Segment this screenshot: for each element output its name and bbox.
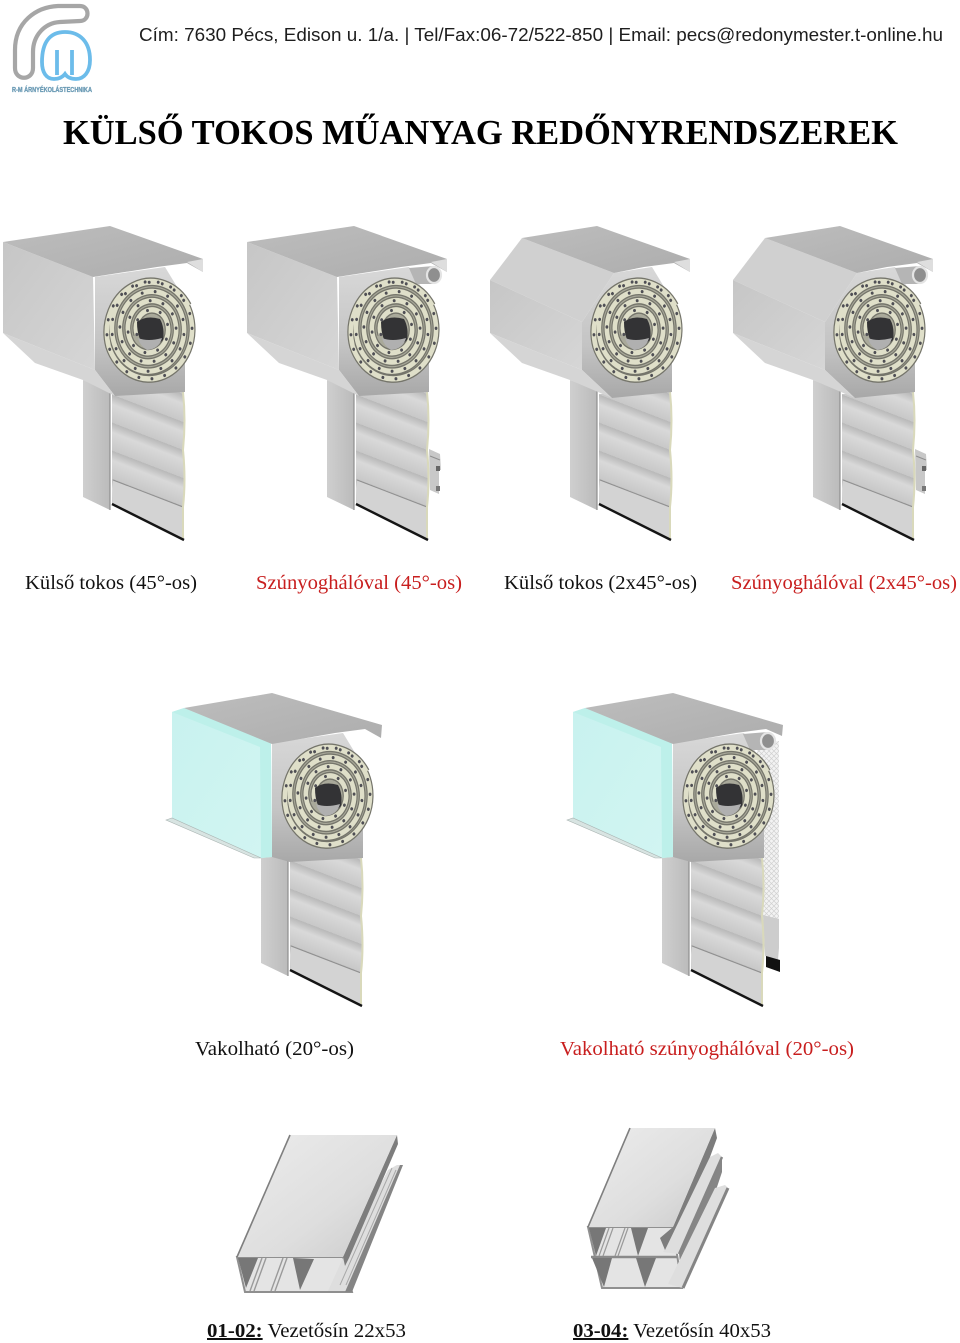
dark band between rails xyxy=(679,1157,722,1264)
left edge xyxy=(588,1128,630,1227)
top face xyxy=(588,1128,715,1227)
top face xyxy=(237,1135,397,1257)
cyan insulated front xyxy=(172,708,272,858)
caption 03-04: 03-04: Vezetősín 40x53 xyxy=(573,1320,771,1342)
caption 01-02: 01-02: Vezetősín 22x53 xyxy=(207,1320,406,1342)
caption row 2 xyxy=(195,1038,854,1060)
shutter 2: with insect net 45 xyxy=(247,226,449,540)
logo: grey arch xyxy=(15,6,88,78)
left edge xyxy=(237,1135,290,1257)
caption 2: Szúnyoghálóval (45°-os) xyxy=(256,572,462,594)
contact line: Cím: 7630 Pécs, Edison u. 1/a. | Tel/Fax:06-72/522-850 | Email: pecs@redonymester.t-online.hu xyxy=(139,25,943,45)
front section xyxy=(588,1227,682,1288)
profile 03-04 xyxy=(588,1128,728,1288)
caption 4: Szúnyoghálóval (2x45°-os) xyxy=(731,572,957,594)
plaster flange xyxy=(166,818,261,858)
title: KÜLSŐ TOKOS MŰANYAG REDŐNYRENDSZEREK xyxy=(63,114,898,152)
rail upper xyxy=(663,1153,722,1254)
shutter 6: plasterable with net 20 xyxy=(567,693,784,1006)
shutter 5: plasterable 20 xyxy=(166,693,383,1006)
caption 3: Külső tokos (2x45°-os) xyxy=(504,572,697,594)
caption 5: Vakolható (20°-os) xyxy=(195,1038,354,1060)
logo: blue arch xyxy=(42,32,90,79)
box lid xyxy=(184,693,382,744)
insect net xyxy=(757,741,779,921)
net guide xyxy=(763,915,779,960)
rail xyxy=(328,1165,401,1291)
shutter 1: external box 45 xyxy=(3,226,205,540)
profile 01-02 xyxy=(237,1135,403,1292)
plaster flange xyxy=(567,818,662,858)
logo xyxy=(12,6,92,94)
box lid xyxy=(585,693,783,744)
caption 1: Külső tokos (45°-os) xyxy=(25,572,197,594)
front section xyxy=(237,1257,352,1292)
logo: caption: R-M ÁRNYÉKOLÁSTECHNIKA xyxy=(12,85,92,94)
shutter 3: external box 2x45 xyxy=(490,226,692,540)
cyan edge band xyxy=(172,708,272,858)
rail lower xyxy=(668,1185,728,1288)
cyan edge band xyxy=(573,708,673,858)
side wall xyxy=(660,1128,717,1250)
cyan insulated front xyxy=(573,708,673,858)
side wall xyxy=(343,1135,398,1266)
caption row 1 xyxy=(25,572,957,594)
caption 6: Vakolható szúnyoghálóval (20°-os) xyxy=(560,1038,854,1060)
shutter 4: with insect net 2x45 xyxy=(733,226,935,540)
tube xyxy=(743,732,775,750)
